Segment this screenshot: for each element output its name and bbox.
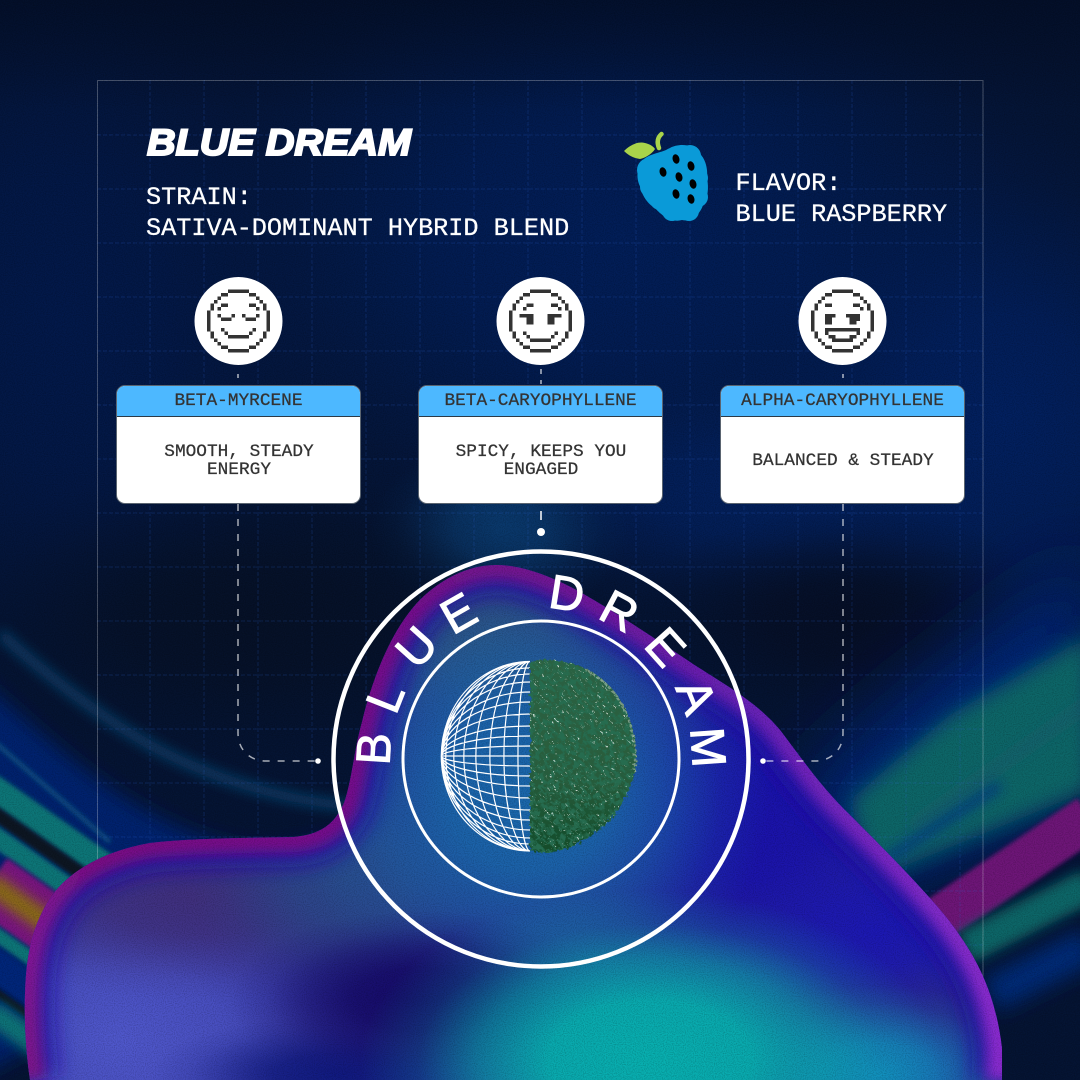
icon: blue raspberry [624,134,708,221]
wireframe half globe [441,662,530,851]
card body: BALANCED & STEADY [752,450,934,470]
grid [97,80,983,1000]
icon: winking pixel smiley [496,277,584,365]
card: alpha-caryophyllene [720,385,965,504]
card header: BETA-CARYOPHYLLENE [444,391,637,411]
card body: SMOOTH, STEADY [164,442,314,462]
text block: flavor: BLUE RASPBERRY [736,200,947,229]
raspberry stem [658,134,662,148]
connector: left terpene to badge [238,504,321,764]
title: BLUE DREAM [147,122,412,163]
raspberry body [637,145,708,221]
card body: ENGAGED [504,460,578,480]
curved badge text: BLUE DREAM [347,566,735,769]
background light streaks left [0,633,400,1075]
text block: flavor: FLAVOR: [736,169,841,198]
text block: strain [146,183,569,243]
cannabis flower half [528,658,638,854]
card body [456,442,626,480]
card body: ENERGY [207,460,271,480]
card header: ALPHA-CARYOPHYLLENE [741,391,944,411]
outer frame [98,80,983,1000]
icon: relaxed pixel smiley [194,277,282,365]
card header [117,386,360,417]
card body [164,442,314,480]
background light streaks right [790,560,1080,995]
text block: strain: STRAIN: [146,183,252,212]
connectors: faces to cards [238,369,843,384]
liquid gradient blob [24,565,1002,1080]
card body: SPICY, KEEPS YOU [456,442,626,462]
badge: concentric circles with curved name [334,552,748,966]
raspberry leaf [624,142,655,159]
card header [419,386,662,417]
text block: strain: SATIVA-DOMINANT HYBRID BLEND [146,214,569,243]
icon: grinning pixel smiley [798,277,886,365]
card: beta-myrcene [116,385,361,504]
inner ring [403,621,679,897]
connector: center terpene to badge [537,511,545,536]
connector: right terpene to badge [760,504,843,764]
outer ring [334,552,748,966]
card: beta-caryophyllene [418,385,663,504]
raspberry seeds [658,153,698,205]
card header [721,386,964,417]
text block: flavor [736,169,947,229]
card header: BETA-MYRCENE [174,391,303,411]
